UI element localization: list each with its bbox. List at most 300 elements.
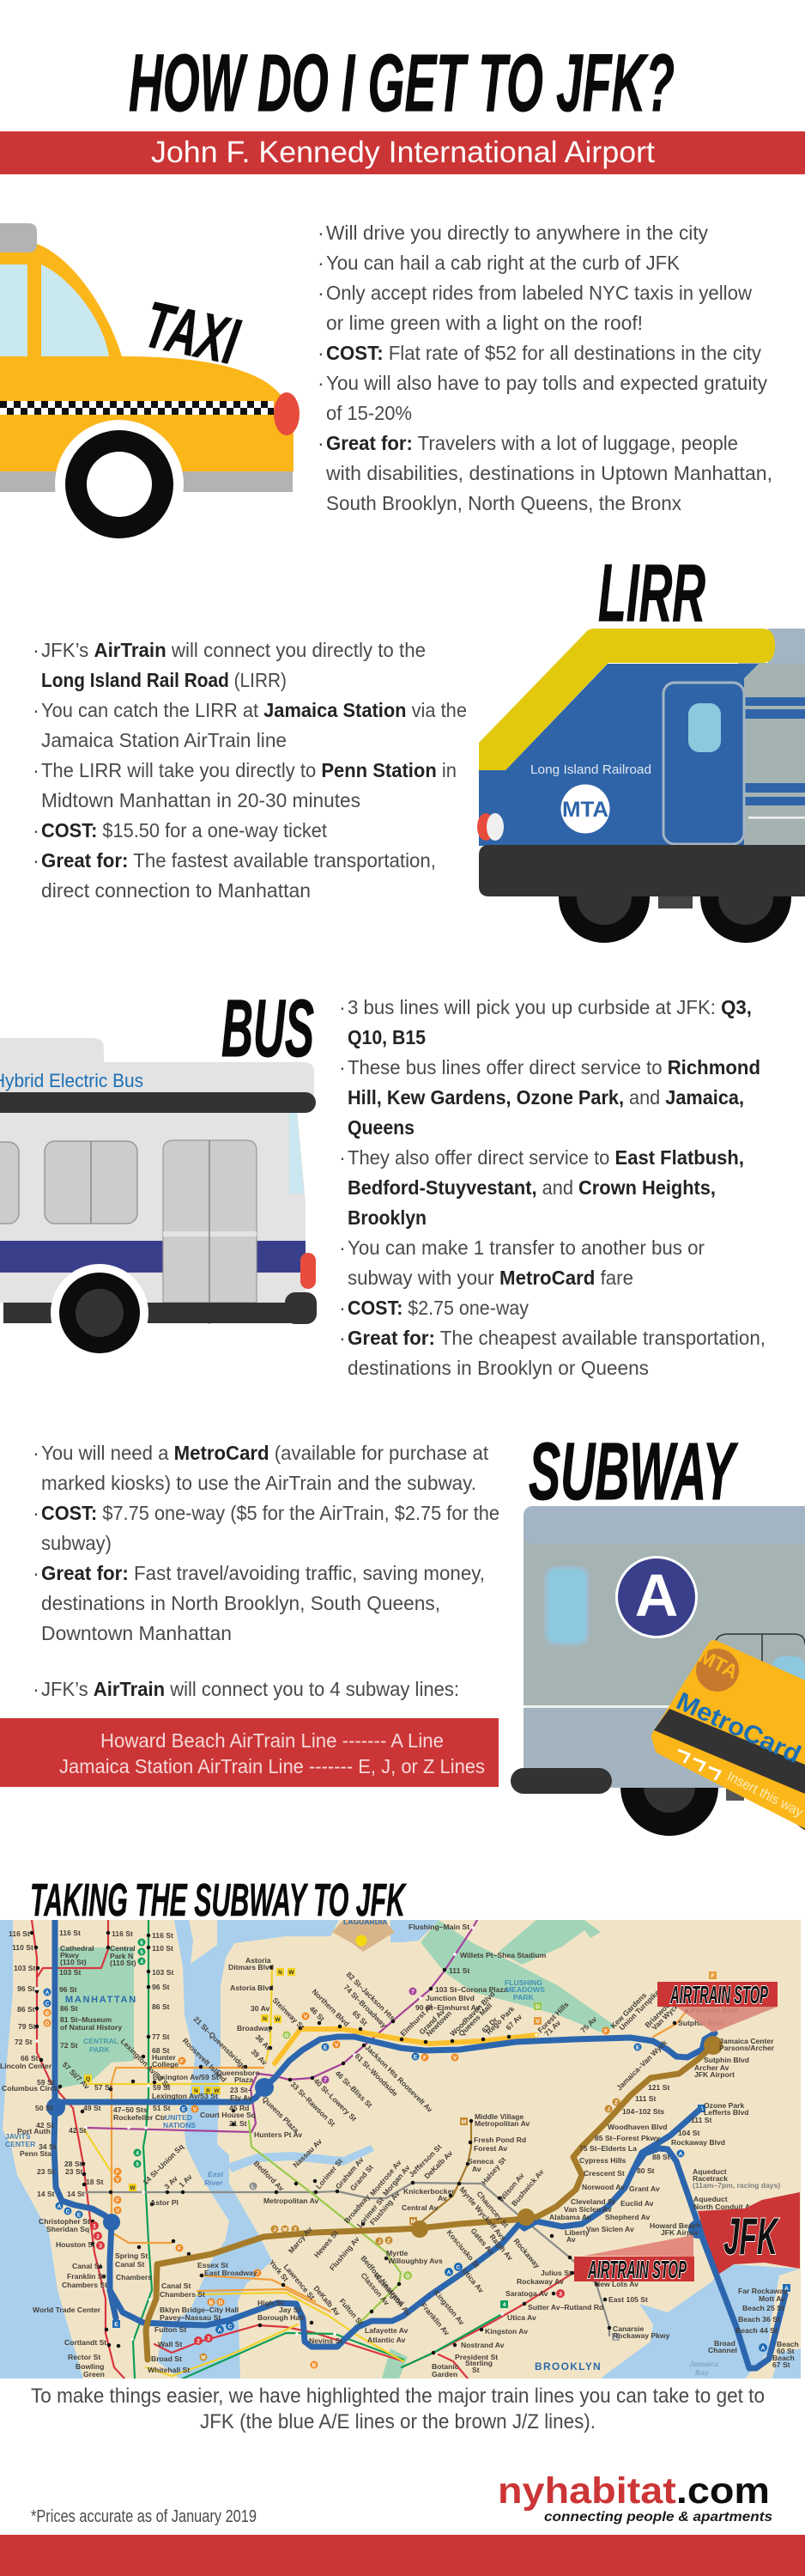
station labels: Kingston Av	[485, 2327, 528, 2336]
station labels: Lorimer St	[314, 2157, 344, 2190]
route bullets: N	[278, 1970, 282, 1976]
station labels: Far Rockaway	[738, 2287, 788, 2295]
station labels: Astoria Blvd	[230, 1984, 274, 1992]
station labels: Fulton St	[154, 2325, 186, 2334]
station labels: 85 St–Forest Pkwy	[595, 2134, 660, 2142]
map area names: CENTRAL	[83, 2037, 118, 2045]
route bullets: F	[116, 2198, 119, 2203]
route bullets: D	[45, 2021, 50, 2026]
station labels: Park N	[110, 1952, 133, 1960]
callout: JFK	[698, 2192, 800, 2275]
subway text block: ·	[33, 1502, 39, 1524]
route bullets: C	[66, 2208, 70, 2215]
callout: upper AirTrain stop	[657, 1982, 778, 2032]
route bullets: Z	[614, 2100, 618, 2105]
station labels: 116 St	[152, 1931, 173, 1940]
station labels: 121 St	[648, 2083, 669, 2092]
station labels: 14 St–Union Sq	[141, 2142, 185, 2186]
station labels: Garden	[432, 2370, 457, 2379]
station labels: Flushing–Main St	[409, 1923, 469, 1931]
route bullets: A	[761, 2346, 766, 2351]
station labels: Beach 44 St	[735, 2326, 778, 2335]
station labels: 23 St	[37, 2167, 55, 2176]
station labels: Whitehall St	[148, 2366, 190, 2374]
route bullets: A	[58, 2203, 62, 2210]
route bullets: V	[453, 2056, 457, 2061]
route bullets: M	[462, 2119, 466, 2125]
route bullets: B	[209, 2300, 214, 2306]
station labels: 46 St	[308, 2004, 326, 2023]
panel: bus	[0, 983, 766, 1379]
station labels: Beach 36 St	[738, 2315, 780, 2324]
station labels: Lafayette Av	[365, 2326, 409, 2335]
station labels: Ditmars Blvd	[228, 1963, 274, 1971]
station labels: Central	[110, 1944, 136, 1953]
route bullets: F	[116, 2169, 119, 2176]
station labels: Chambers St	[160, 2290, 205, 2299]
station labels: of Natural History	[60, 2023, 122, 2032]
station labels: Kingston Av	[432, 2288, 466, 2327]
route bullets: 2	[197, 2339, 200, 2344]
station labels: 42 St	[36, 2121, 54, 2129]
subway text block: COST: $7.75 one-way ($5 for the AirTrain, $2.75 for the	[41, 1502, 499, 1524]
map area names: River	[204, 2178, 223, 2187]
LIRR text block: direct connection to Manhattan	[41, 879, 311, 902]
station labels: Nassau Av	[291, 2137, 324, 2169]
station labels: Sutphin Blvd	[704, 2056, 749, 2064]
transfer stations (white)	[37, 1928, 536, 2339]
station labels: 77 St	[152, 2032, 170, 2041]
bus text block: Q10, B15	[348, 1026, 426, 1048]
station labels: Parsons Blvd	[691, 2006, 738, 2014]
bus text block: These bus lines offer direct service to Richmond	[348, 1056, 760, 1078]
station labels: 75 Av	[578, 2014, 598, 2034]
station labels: Kosciusko St	[445, 2228, 481, 2269]
station labels: High St	[257, 2299, 283, 2307]
station labels: Astor Pl	[150, 2198, 179, 2207]
subway text block: ·	[33, 1562, 39, 1584]
route bullets: V	[335, 2042, 339, 2049]
taxi text block: Great for: Travelers with a lot of luggage, people	[326, 432, 738, 454]
station labels: Grand St	[348, 2163, 375, 2192]
station labels: 59 St	[153, 2083, 171, 2092]
station labels	[0, 1923, 799, 2379]
station labels: Fresh Pond Rd	[474, 2136, 526, 2144]
station labels: Queensboro	[216, 2069, 260, 2077]
bus text block: destinations in Brooklyn or Queens	[348, 1357, 649, 1379]
route bullets: E	[114, 2322, 118, 2328]
station labels: 103 St	[59, 1968, 81, 1977]
station labels: Broad St	[151, 2354, 182, 2363]
LIRR text block: ·	[33, 699, 39, 721]
station labels: Aqueduct	[693, 2167, 727, 2176]
route bullets: N	[194, 2088, 198, 2094]
station labels: Willoughby Avs	[388, 2257, 443, 2265]
route bullets: E	[182, 2107, 186, 2112]
station labels: 21 St	[229, 2119, 247, 2128]
station labels: 81 St–Museum	[60, 2015, 112, 2024]
station labels: Franklin St	[67, 2272, 106, 2281]
route bullets	[43, 1939, 790, 2368]
map area names: NATIONS	[163, 2121, 196, 2129]
station labels: 86 St	[60, 2004, 78, 2013]
station labels: Wall St	[158, 2340, 182, 2348]
route bullets: W	[275, 2017, 281, 2023]
station labels: Van Wyck Blvd	[650, 1989, 693, 2032]
station labels: Myrtle Wyckoff Avs	[457, 2185, 508, 2243]
station labels: Ozone Park	[704, 2101, 745, 2110]
station labels: Newtown	[424, 2009, 453, 2038]
LIRR text block: Long Island Rail Road (LIRR)	[41, 669, 287, 691]
station labels: DeKalb Av	[312, 2284, 342, 2318]
station labels: Sterling	[465, 2359, 493, 2367]
station labels: 65 St	[351, 2008, 369, 2027]
station labels: Cathedral	[60, 1944, 94, 1953]
station labels: Beach	[777, 2340, 799, 2348]
station labels: Channel	[708, 2346, 737, 2354]
station labels: Hewes St	[312, 2228, 340, 2259]
station labels: Penn Sta	[20, 2149, 51, 2158]
station labels: Cortlandt St	[64, 2338, 106, 2347]
route bullets: 1	[93, 2224, 96, 2229]
bus text block	[339, 996, 766, 1379]
footer band	[0, 2535, 805, 2576]
footnote: *Prices accurate as of January 2019	[31, 2507, 257, 2526]
route bullets: L	[251, 2184, 255, 2190]
station labels: Nostrand Av	[461, 2341, 505, 2349]
station labels: Rockaway Blvd	[671, 2138, 725, 2147]
station labels: 57 St/7 Av	[61, 2060, 91, 2091]
station labels: Woodhaven Blvd	[608, 2123, 668, 2131]
icon: MetroCard: MTA	[695, 1644, 741, 1683]
station labels: 110 St	[12, 1943, 33, 1952]
station labels: Union Turnpike	[617, 1988, 662, 2032]
taxi text block: with disabilities, destinations in Uptown Manhattan,	[325, 462, 772, 484]
station labels: Sutphin Blvd	[678, 2019, 723, 2027]
map area names: Jamaica	[689, 2360, 718, 2368]
LIRR text block: ·	[33, 849, 39, 872]
map area names: MANHATTAN	[65, 1995, 137, 2005]
icon: LIRR train	[477, 629, 805, 943]
map water	[0, 1920, 801, 2379]
bus text block: They also offer direct service to East Flatbush,	[348, 1146, 744, 1169]
taxi text block: of 15-20%	[326, 402, 412, 424]
bus heading: BUS	[221, 983, 314, 1074]
station labels: 28 St	[64, 2160, 82, 2168]
station labels: 18 St	[86, 2178, 104, 2186]
bus text block: ·	[339, 1297, 346, 1319]
station labels: (11am–7pm, racing days)	[693, 2181, 780, 2190]
LIRR text block: JFK’s AirTrain will connect you directly to the	[41, 639, 426, 661]
station labels: Rego Park	[484, 2004, 517, 2036]
panel: LIRR	[33, 548, 805, 943]
station labels: JFK Airport	[694, 2070, 735, 2079]
station labels: Hunter	[152, 2053, 176, 2062]
station labels: Bowling	[76, 2362, 104, 2371]
map area names	[5, 1978, 718, 2377]
station labels: New Lots Av	[595, 2280, 639, 2288]
route bullets: A	[699, 2106, 704, 2112]
station labels: 63 Dr	[480, 2015, 499, 2034]
taxi text block: ·	[318, 252, 324, 274]
subway text block	[33, 1442, 499, 1700]
station labels: Utica Av	[507, 2313, 536, 2322]
station labels: 116 St	[9, 1929, 30, 1938]
map area names: Bay	[695, 2368, 710, 2377]
LIRR text block: Midtown Manhattan in 20-30 minutes	[41, 789, 360, 811]
station labels: Beach	[772, 2354, 795, 2362]
station labels: Broadway	[237, 2024, 272, 2032]
station labels: 1 Av	[177, 2172, 194, 2189]
map heading: TAKING THE SUBWAY TO JFK	[30, 1874, 407, 1926]
station labels: 34 St	[39, 2142, 57, 2151]
icon: MetroCard	[654, 1644, 805, 1827]
route bullets: B	[45, 2011, 50, 2016]
LIRR text block: The LIRR will take you directly to Penn Station in	[41, 759, 457, 781]
subway text block: Great for: Fast travel/avoiding traffic, saving money,	[41, 1562, 485, 1584]
route bullets: A	[679, 2152, 683, 2157]
taxi text block: You can hail a cab right at the curb of JFK	[326, 252, 680, 274]
station labels: 75 St–Elderts La	[579, 2144, 637, 2153]
route bullets: Q	[86, 2076, 90, 2082]
highlighted blue A/E lines	[54, 1920, 785, 2368]
route bullets: W	[130, 2185, 136, 2191]
map area names: UNITED	[165, 2113, 192, 2122]
taxi text block: Will drive you directly to anywhere in the city	[326, 222, 708, 244]
station labels: 80 St	[637, 2166, 655, 2175]
map area names: JAVITS	[5, 2132, 31, 2141]
route bullets: 3	[207, 2336, 210, 2342]
station labels: (110 St)	[110, 1959, 136, 1967]
station labels: 116 St	[112, 1929, 133, 1938]
route bullets: R	[206, 2088, 210, 2094]
station labels: 67 St	[772, 2360, 790, 2369]
taxi text block: ·	[318, 282, 324, 304]
station labels: Astoria	[245, 1956, 271, 1965]
bus text block: Brooklyn	[348, 1206, 427, 1229]
subway map	[0, 1917, 801, 2379]
station labels: Roosevelt Island	[181, 2036, 228, 2084]
subway text block: marked kiosks) to use the AirTrain and the subway.	[41, 1472, 476, 1494]
station labels: Bedford Nostrand	[359, 2254, 406, 2307]
route bullets: E	[324, 2045, 328, 2050]
station labels: Saratoga Av	[505, 2289, 548, 2298]
station labels: 61 St–Woodside	[354, 2051, 400, 2098]
taxi text block: ·	[318, 222, 324, 244]
route bullets: F	[711, 1973, 715, 1979]
route bullets: G	[284, 2033, 289, 2038]
route bullets: F	[180, 2059, 184, 2064]
taxi text block: COST: Flat rate of $52 for all destinations in the city	[326, 342, 761, 364]
station labels: Washington Av	[372, 2271, 413, 2318]
panel: subway	[0, 1426, 805, 1836]
station labels: 111 St	[449, 1966, 470, 1975]
route bullets: 4	[503, 2302, 506, 2308]
route bullets: V	[116, 2208, 120, 2214]
route bullets: E	[414, 2054, 418, 2061]
station labels: Marcy Av	[287, 2225, 314, 2255]
LaGuardia airport: LAGUARDIA	[343, 1917, 388, 1926]
route bullets: F	[604, 2028, 608, 2035]
station labels: 72 St	[15, 2038, 33, 2046]
station labels: Jamaica Center	[719, 2037, 774, 2045]
station labels: Fulton St	[337, 2297, 365, 2327]
station labels: Canarsie	[613, 2324, 645, 2333]
route bullets: J	[607, 2107, 610, 2112]
station labels: Cleveland St	[571, 2197, 615, 2206]
station labels: World Trade Center	[33, 2306, 101, 2314]
station labels: Sutter Av–Rutland Rd	[528, 2303, 603, 2312]
station labels: Lincoln Center	[0, 2062, 52, 2070]
station labels: Hunters Pt Av	[254, 2130, 302, 2139]
station labels: Northern Blvd	[311, 1987, 351, 2028]
station labels: Lexington Av/53 St	[152, 2092, 218, 2100]
bus text block: ·	[339, 1146, 346, 1169]
station labels: Chambers St	[62, 2281, 107, 2289]
taxi text block: You will also have to pay tolls and expected gratuity	[326, 372, 767, 394]
route bullets: V	[536, 2019, 540, 2025]
taxi text block	[318, 222, 772, 514]
route bullets: J	[378, 2239, 381, 2245]
station labels: Ely Av	[230, 2093, 252, 2102]
station labels: 103 St	[14, 1964, 35, 1972]
LIRR text block: COST: $15.50 for a one-way ticket	[41, 819, 327, 841]
station labels: North Conduit Av	[693, 2202, 754, 2211]
station labels: JFK Airport	[661, 2228, 701, 2237]
station labels: 96 St	[59, 1985, 77, 1994]
station labels: (110 St)	[60, 1958, 87, 1966]
route bullets: C	[228, 2324, 233, 2330]
bus text block: ·	[339, 1327, 346, 1349]
map area names: PARK	[513, 1993, 535, 2002]
station labels: 30 Av	[251, 2004, 270, 2013]
LIRR text block: ·	[33, 759, 39, 781]
station labels: Christopher St	[39, 2217, 90, 2226]
callout: AirTrain lines	[0, 1718, 499, 1787]
icon: hybrid electric bus	[0, 1038, 317, 1362]
route bullets: A	[218, 2327, 222, 2334]
station labels: 72 St	[60, 2041, 78, 2050]
map island	[189, 1920, 217, 1964]
station labels: 51 St	[153, 2104, 171, 2112]
station labels: Flushing Av	[368, 2190, 402, 2227]
route bullets: C	[45, 2001, 50, 2008]
callout: lower AirTrain stop: AIRTRAIN STOP	[587, 2257, 687, 2284]
station labels: Rockaway Pkwy	[613, 2331, 670, 2340]
icon: taxi cab	[0, 223, 300, 549]
station labels: 103 St–Corona Plaza	[435, 1985, 508, 1994]
station labels: Chambers	[116, 2273, 152, 2281]
map parks	[58, 1920, 616, 2379]
route bullets: A	[45, 1990, 50, 1996]
taxi text block: ·	[318, 372, 324, 394]
map area names: East	[208, 2170, 224, 2178]
station labels: Franklin Av	[419, 2301, 451, 2337]
bus text block: Queens	[348, 1116, 415, 1139]
station labels: Ralph Av	[487, 2233, 515, 2262]
map area names: PARK	[89, 2045, 111, 2054]
subway text block: JFK’s AirTrain will connect you to 4 subway lines:	[41, 1678, 459, 1700]
station labels: Lexington Av/63 St	[119, 2037, 172, 2090]
taxi text block: ·	[318, 342, 324, 364]
map caption	[31, 2385, 765, 2433]
station labels: 14 St	[37, 2190, 55, 2198]
route bullets: M	[411, 2219, 415, 2225]
route bullets: A	[447, 2270, 451, 2275]
station labels: Canal St	[72, 2262, 102, 2270]
route bullets: W	[214, 2088, 220, 2094]
station labels: Houston St	[56, 2240, 95, 2249]
station labels: Montrose Av	[368, 2158, 403, 2197]
icon: subway train	[511, 1506, 805, 1836]
station labels: Euclid Av	[620, 2199, 654, 2208]
LaGuardia airport	[332, 1917, 395, 1952]
station labels: Wilson Av	[497, 2171, 526, 2203]
icon: LIRR train: MTA	[562, 798, 608, 822]
station labels: York St	[267, 2258, 290, 2283]
station labels: Utica Av	[460, 2267, 486, 2294]
station labels: 21 St–Queensbridge	[192, 2014, 249, 2071]
station labels: 33 St–Rawson St	[289, 2080, 337, 2128]
station labels: Junction Blvd	[426, 1994, 475, 2002]
map area names: CENTER	[5, 2140, 36, 2148]
station labels: Atlantic Av	[367, 2336, 405, 2344]
station labels: East Broadway	[204, 2269, 257, 2277]
route bullets: Z	[387, 2238, 390, 2245]
taxi text block: or lime green with a light on the roof!	[326, 312, 643, 334]
station labels: Van Siclen Av	[586, 2225, 634, 2233]
station labels: Woodhaven Blvd	[448, 1990, 497, 2038]
subway text block: You will need a MetroCard (available for purchase at	[41, 1442, 488, 1464]
station labels: East 105 St	[608, 2295, 648, 2304]
Queens Boulevard line	[275, 2029, 536, 2063]
station labels: Queens Plaza	[261, 2094, 300, 2135]
station labels: Lawrence St	[281, 2263, 317, 2301]
station labels: Lorimer St	[355, 2196, 385, 2229]
station labels: Canal St	[115, 2260, 145, 2269]
station labels: Jay St	[279, 2306, 300, 2314]
station labels: Forest Av	[474, 2144, 507, 2153]
callout: AirTrain lines: Howard Beach AirTrain Line ------- A Line	[100, 1729, 444, 1752]
map area names: MEADOWS	[505, 1985, 545, 1994]
station labels: Canal St	[161, 2281, 191, 2290]
LIRR text block: You can catch the LIRR at Jamaica Station via the	[41, 699, 467, 721]
icon: subway train: A	[635, 1562, 678, 1629]
station labels: Sheridan Sq	[46, 2225, 89, 2233]
subway text block: ·	[33, 1442, 39, 1464]
route bullets: 7	[411, 1989, 415, 1996]
station labels: Flushing Av	[328, 2235, 361, 2272]
route bullets: G	[405, 2274, 410, 2279]
route bullets: 4	[140, 1959, 143, 1965]
station labels: Aqueduct	[693, 2195, 728, 2203]
station labels: Rockefeller Ctr	[113, 2113, 166, 2122]
transfer nodes	[46, 2036, 723, 2239]
station labels: Julius St	[541, 2269, 572, 2277]
station labels: Gates Av	[469, 2227, 496, 2257]
route bullets: 2	[96, 2234, 100, 2239]
station labels: 111 St	[691, 2116, 712, 2124]
station labels: Chauncey St	[475, 2190, 511, 2229]
station labels: Van Siclen Av	[564, 2205, 612, 2214]
route bullets: F	[178, 2246, 181, 2251]
station labels: Bklyn Bridge–City Hall	[160, 2306, 239, 2314]
station labels: Crescent St	[584, 2169, 625, 2178]
bus text block: subway with your MetroCard fare	[348, 1267, 633, 1289]
station labels: Alabama Av	[549, 2213, 591, 2221]
bus text block: 3 bus lines will pick you up curbside at JFK: Q3,	[348, 996, 752, 1018]
station labels: 45 Rd	[229, 2104, 249, 2112]
